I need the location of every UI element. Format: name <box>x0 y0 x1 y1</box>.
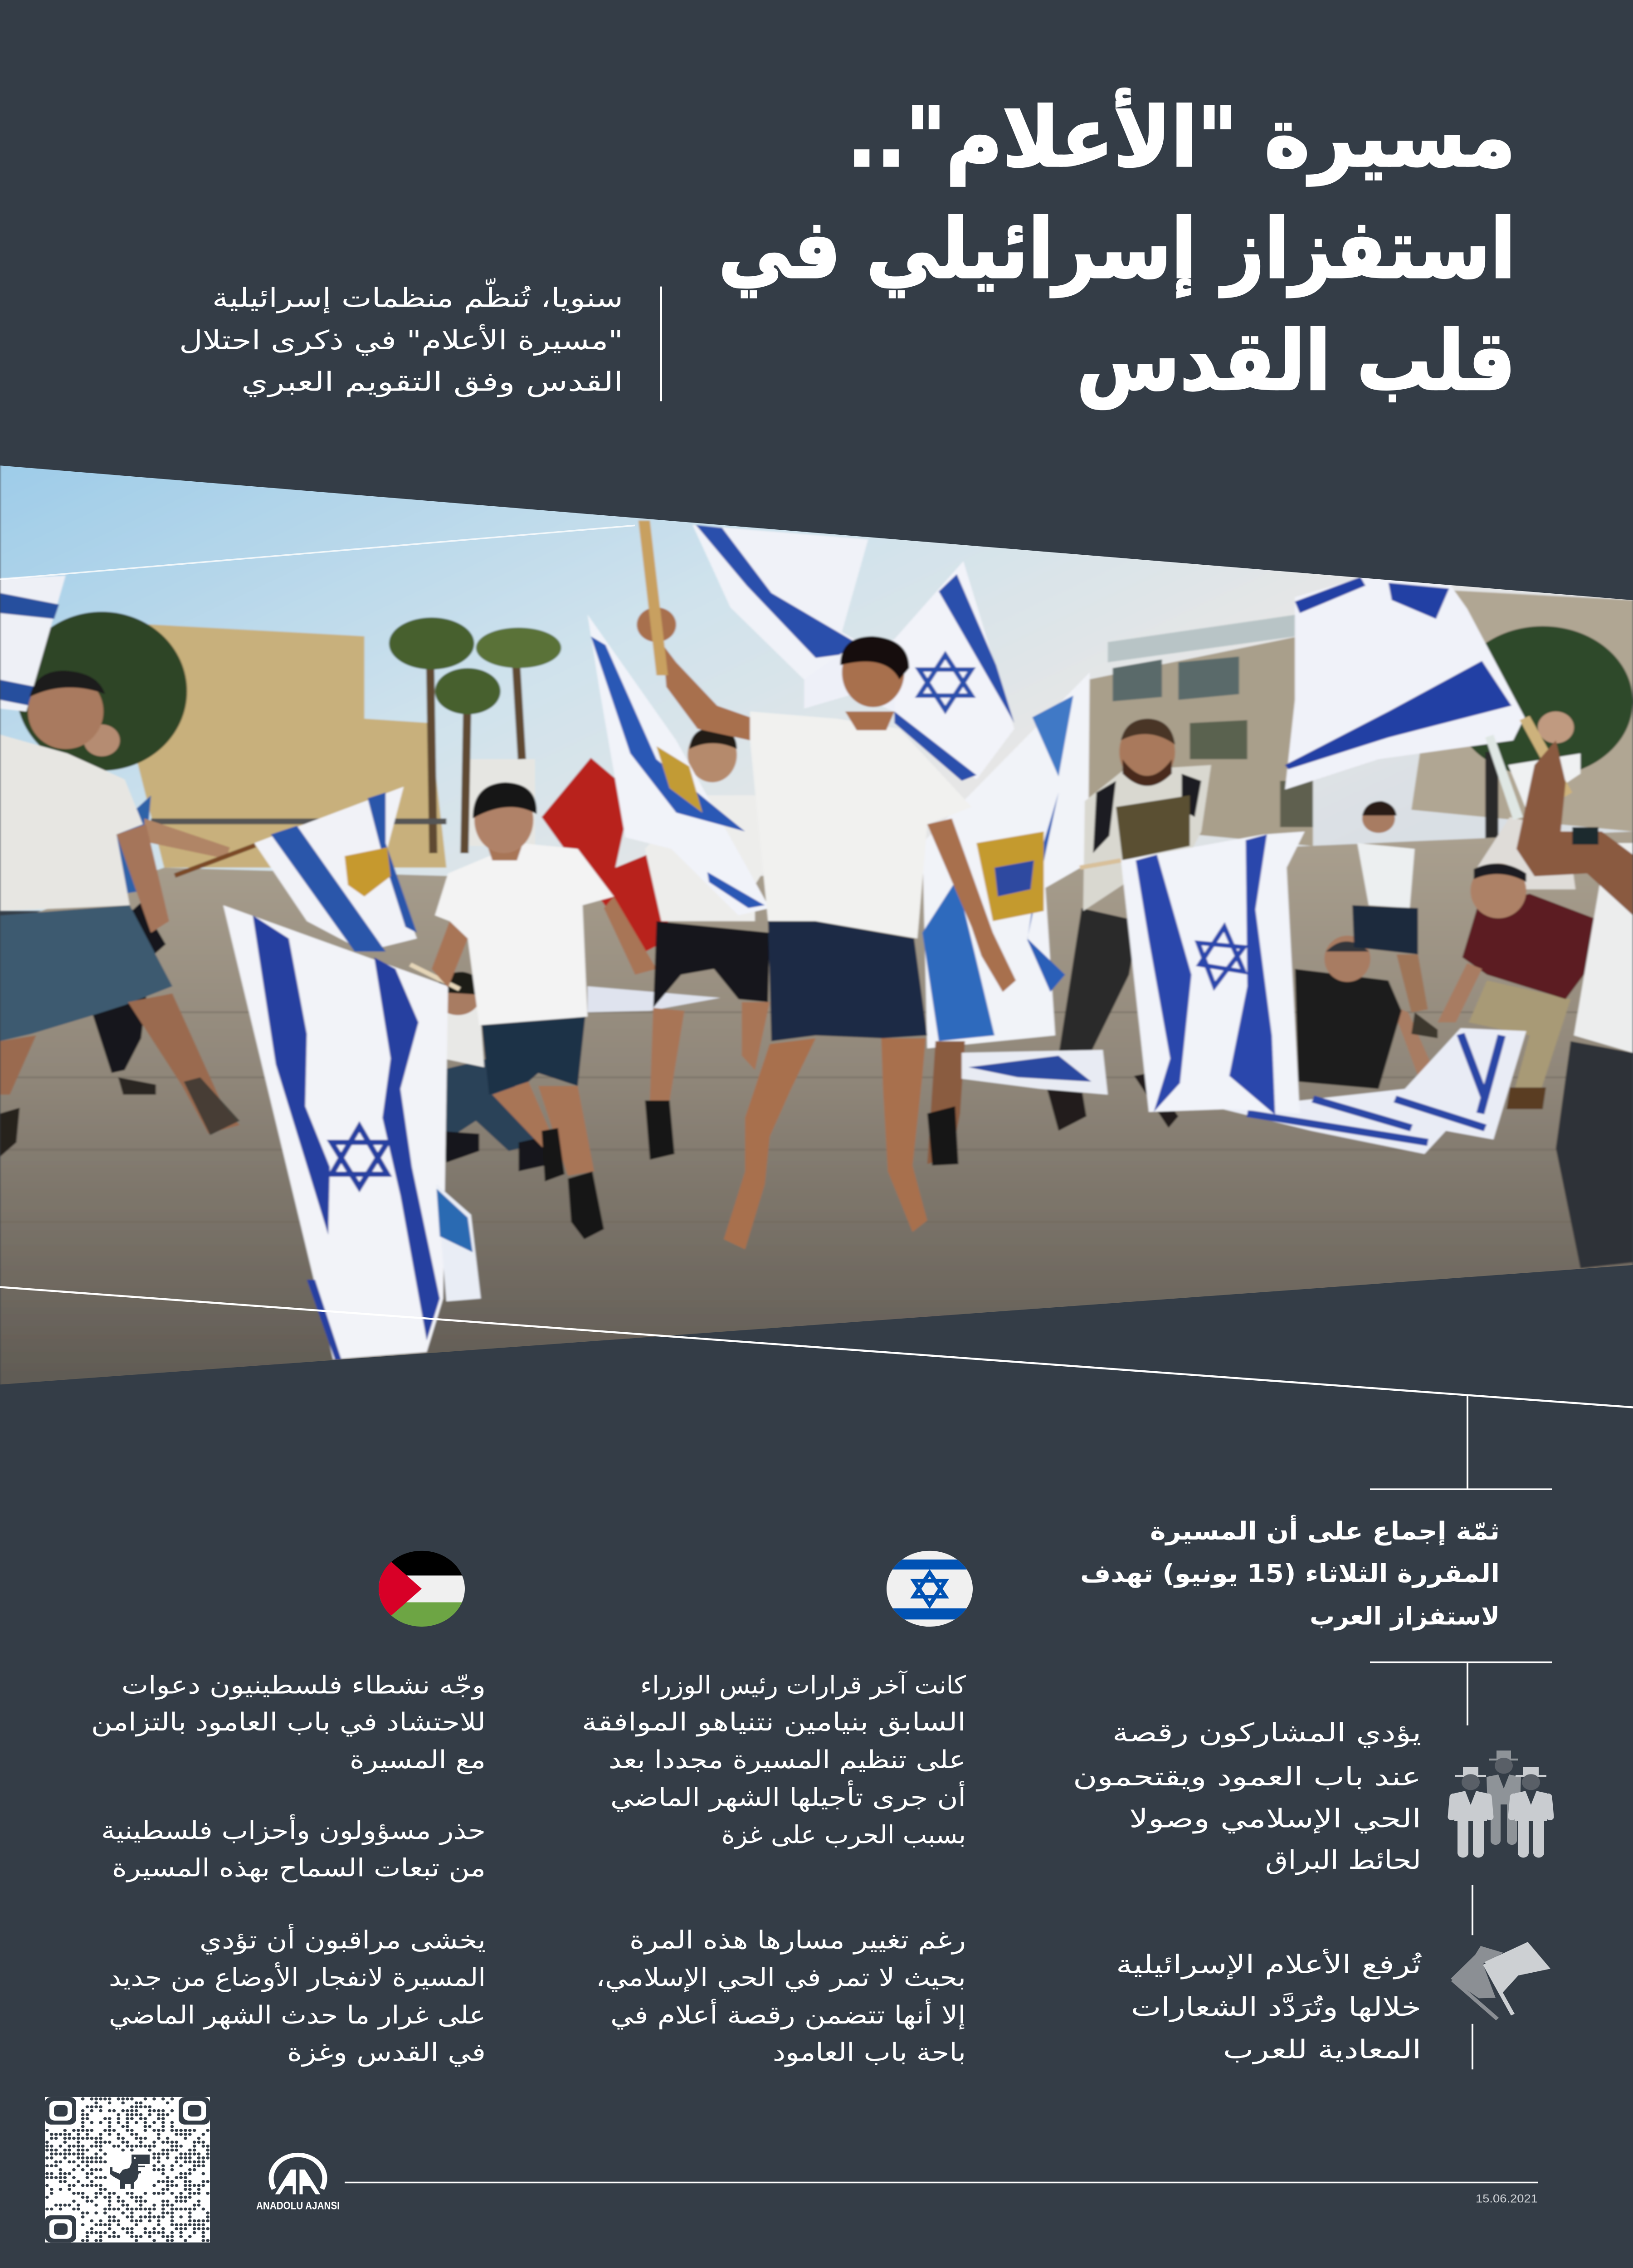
column: Israeli side: إلا أنها تتضمن رقصة أعلام في <box>610 1999 966 2030</box>
flag with blue stripe on boy <box>588 615 770 915</box>
big centre flag <box>1080 831 1526 1154</box>
diagonal rule <box>0 1287 1633 1408</box>
flag top centre <box>692 525 870 679</box>
subtitle: القدس وفق التقويم العبري <box>241 366 623 397</box>
highlighted statement: ثمّة إجماع على أن المسيرة <box>1150 1515 1500 1546</box>
crouching man maroon <box>1438 863 1602 1109</box>
icon: flags <box>1451 1942 1550 2019</box>
sky <box>0 448 1633 911</box>
finder bottom left <box>45 2215 76 2243</box>
column: Israeli side: رغم تغيير مسارها هذه المرة <box>629 1926 966 1955</box>
kneeling man <box>1295 936 1438 1089</box>
flag behind main with star <box>804 561 1014 781</box>
boy centre shouting <box>432 782 657 1239</box>
logo: Anadolu Ajansi: ANADOLU AJANSI <box>256 2200 340 2212</box>
text: dance: لحائط البراق <box>1265 1846 1421 1875</box>
column: Israeli side: بحيث لا تمر في الحي الإسلامي، <box>596 1963 966 1992</box>
finder top right <box>179 2097 210 2125</box>
pavement joints <box>0 1012 1633 1301</box>
finder top left <box>45 2097 76 2125</box>
text: flags <box>1116 1949 1422 2065</box>
man behind left <box>75 724 230 1095</box>
text: dance: يؤدي المشاركون رقصة <box>1112 1718 1421 1748</box>
subtitle: "مسيرة الأعلام" في ذكرى احتلال <box>179 324 623 356</box>
highlighted statement: لاستفزاز العرب <box>1310 1602 1500 1631</box>
text: flags: تُرفع الأعلام الإسرائيلية <box>1116 1949 1422 1980</box>
man jumping left <box>0 671 239 1157</box>
title <box>718 88 1516 409</box>
ground cloth left <box>588 986 721 1012</box>
column: Palestinian side: للاحتشاد في باب العامود بالتزامن <box>91 1708 486 1737</box>
column: Palestinian side <box>91 1671 486 2067</box>
column: Israeli side: أن جرى تأجيلها الشهر الماضي <box>610 1780 966 1812</box>
column: Israeli side: كانت آخر قرارات رئيس الوزراء <box>640 1670 966 1700</box>
column: Palestinian side: على غرار ما حدث الشهر الماضي <box>109 2000 486 2030</box>
text: dance <box>1073 1718 1421 1875</box>
column: Palestinian side: من تبعات السماح بهذه المسيرة <box>112 1853 486 1883</box>
large flag foreground <box>223 905 481 1359</box>
date: 15.06.2021 <box>1476 2192 1538 2205</box>
column: Israeli side: باحة باب العامود <box>773 2038 966 2067</box>
column: Israeli side: على تنظيم المسيرة مجددا بعد <box>609 1745 966 1774</box>
connector middle <box>1472 1885 1473 2069</box>
icon: settlers <box>1452 1750 1550 1853</box>
flag top right <box>1285 577 1572 820</box>
column: Palestinian side: في القدس وغزة <box>287 2038 486 2067</box>
man with raised arm at right edge <box>1516 740 1633 1268</box>
column: Palestinian side: مع المسيرة <box>350 1745 486 1774</box>
photo: flag march <box>0 448 1633 1388</box>
title: مسيرة "الأعلام".. <box>847 88 1516 186</box>
column: Palestinian side: وجّه نشطاء فلسطينيون دعوات <box>122 1671 486 1700</box>
boy with black shorts <box>645 728 781 1160</box>
ground cloth centre <box>962 1050 1108 1095</box>
crouching kid <box>417 972 545 1171</box>
text: dance: عند باب العمود ويقتحمون <box>1073 1762 1421 1792</box>
subtitle: سنويا، تُنظّم منظمات إسرائيلية <box>212 278 623 313</box>
girl on shoulders <box>1477 711 1580 890</box>
column: Israeli side: بسبب الحرب على غزة <box>721 1820 966 1850</box>
man with backpack <box>1045 719 1211 1131</box>
text: flags: خلالها وتُرَدَّد الشعارات <box>1131 1993 1421 2022</box>
subtitle <box>179 278 623 397</box>
highlighted statement: المقررة الثلاثاء (15 يونيو) تهدف <box>1080 1559 1500 1589</box>
right building and tree <box>1088 590 1633 868</box>
connector top <box>1370 1394 1552 1725</box>
QR code <box>45 2097 210 2243</box>
city wall and trees <box>16 612 561 868</box>
icon: Israel flag <box>887 1551 973 1627</box>
column: Palestinian side: يخشى مراقبون أن تؤدي <box>200 1924 486 1955</box>
flag left top <box>0 576 66 711</box>
main man jumping <box>637 521 1016 1249</box>
text: flags: المعادية للعرب <box>1223 2035 1421 2065</box>
column: Palestinian side: حذر مسؤولون وأحزاب فلسطينية <box>101 1814 486 1845</box>
footer rule <box>345 2182 1538 2183</box>
flag with emblem small <box>174 787 417 952</box>
column: Israeli side <box>582 1670 966 2067</box>
boy with glasses <box>1352 801 1438 1038</box>
column: Palestinian side: المسيرة لانفجار الأوضاع من جديد <box>109 1962 486 1992</box>
title: قلب القدس <box>1077 313 1516 409</box>
icon: dino <box>110 2155 150 2189</box>
icon: Palestine flag <box>376 1549 465 1629</box>
highlighted statement <box>1080 1515 1500 1631</box>
logo: Anadolu Ajansi <box>256 2155 340 2212</box>
text: dance: الحي الإسلامي وصولا <box>1129 1804 1421 1833</box>
pavement <box>0 831 1633 1388</box>
column: Israeli side: السابق بنيامين نتنياهو الموافقة <box>582 1708 966 1737</box>
column: key points <box>1073 1394 1552 2069</box>
big flag with emblem <box>922 672 1090 1048</box>
line crossing sky <box>0 525 635 579</box>
subtitle divider <box>660 287 662 401</box>
red sculpture <box>541 758 668 954</box>
